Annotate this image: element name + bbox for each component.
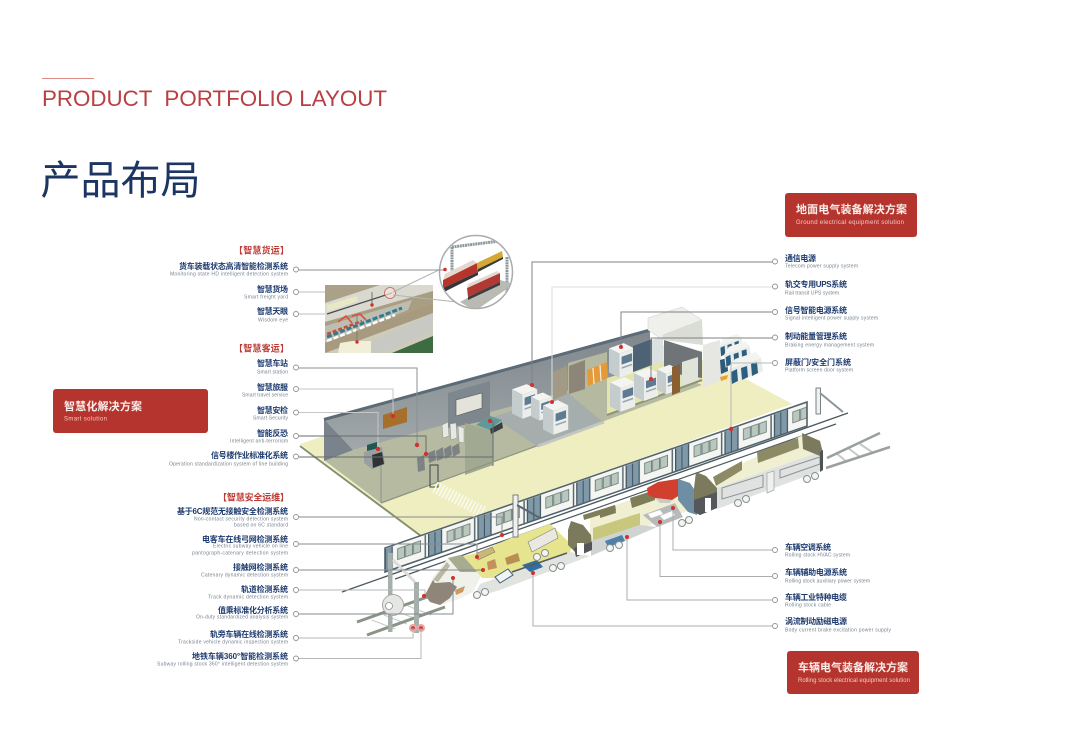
label: braking energy: Braking energy management system <box>785 343 874 349</box>
label: eddy current brake power: 涡流制动励磁电源 <box>785 616 847 626</box>
heading: smart freight: 【智慧货运】 <box>234 244 289 256</box>
room: power equipment floor edge <box>538 422 604 446</box>
magnifier: trains under gantry <box>440 236 514 311</box>
label: rolling stock cable: Rolling stock cable <box>785 603 831 609</box>
label: telecom power: Telecom power supply system <box>785 264 858 270</box>
panel: smart solution tag <box>53 389 208 433</box>
icon: trackside wheel scanner <box>382 594 404 616</box>
label: wisdom eye: 智慧天眼 <box>257 306 288 316</box>
label: smart security: 智慧安检 <box>257 405 288 415</box>
label: non-contact detection: based on 6C standard <box>234 523 288 529</box>
label: eddy current brake power: Body current brake excitation power supply <box>785 628 892 634</box>
label: intelligent anti-terrorism: Intelligent anti-terrorism <box>230 439 288 445</box>
platform crosswalk <box>435 487 483 512</box>
label: platform screen door <box>772 357 853 374</box>
label: 360 detection: 地铁车辆360°智能检测系统 <box>192 651 288 661</box>
room: power equipment floor <box>493 393 603 447</box>
label: catenary detection: Catenary dynamic detection system <box>201 573 288 579</box>
panel: rolling stock electrical equipment tag: 车辆电气装备解决方案 <box>798 660 908 674</box>
panel: ground electrical equipment tag: Ground electrical equipment solution <box>796 220 904 226</box>
red system markers <box>376 268 733 598</box>
label: smart travel service: Smart travel service <box>242 393 288 399</box>
label: trackside inspection: 轨旁车辆在线检测系统 <box>210 629 288 639</box>
building floor <box>324 365 702 503</box>
label: trackside inspection <box>178 629 298 646</box>
building walls <box>324 330 652 503</box>
label: wisdom eye <box>257 306 298 324</box>
icon: magnifier origin ring <box>384 288 396 298</box>
label: telecom power: 通信电源 <box>785 253 816 263</box>
label: eddy current brake power <box>772 616 892 634</box>
panel: rolling stock electrical equipment tag: Rolling stock electrical equipment solution <box>798 678 910 684</box>
label: braking energy <box>772 331 874 349</box>
wall window picture <box>456 393 482 416</box>
label: rail transit UPS: 轨交专用UPS系统 <box>785 279 847 289</box>
service desk cluster <box>476 416 503 434</box>
label: platform screen door: Platform screen door system <box>785 368 853 374</box>
Chinese title: 产品布局 <box>40 159 200 203</box>
label: track detection: 轨道检测系统 <box>241 584 288 594</box>
train: third car exterior <box>713 435 823 509</box>
ticket gates <box>442 422 464 443</box>
cabinets: communications and UPS <box>512 360 608 435</box>
leader lines: rolling stock <box>533 508 772 626</box>
security gates <box>417 443 460 472</box>
label: smart security: Smart Security <box>253 416 288 422</box>
heading: smart safety operations: 【智慧安全运维】 <box>218 492 289 502</box>
label: rolling stock HVAC: 车辆空调系统 <box>785 542 831 552</box>
label: track detection <box>208 584 298 601</box>
label: pantograph detection: pantograph-catenary detection system <box>192 551 288 557</box>
panel: smart solution tag: Smart solution <box>64 416 107 422</box>
label: smart freight yard <box>244 284 298 301</box>
label: signal power: Signal intelligent power supply system <box>785 316 878 322</box>
label: operation standardization <box>169 450 298 468</box>
left track <box>357 596 445 635</box>
panel: smart solution tag: 智慧化解决方案 <box>64 399 142 413</box>
label: smart security <box>253 405 298 422</box>
panel: rolling stock electrical equipment tag <box>787 651 919 694</box>
label: catenary detection <box>201 562 298 579</box>
leader lines: ground equipment <box>532 262 772 429</box>
label: wisdom eye: Wisdom eye <box>258 318 288 324</box>
right track <box>826 433 890 468</box>
label: rolling stock HVAC <box>772 542 850 559</box>
panel: ground electrical equipment tag: 地面电气装备解决方案 <box>796 202 907 216</box>
label: trackside inspection: Trackside vehicle dynamic inspection system <box>178 640 288 646</box>
label: rail transit UPS <box>772 279 847 297</box>
leader lines: smart freight <box>299 270 445 314</box>
cooling units <box>719 334 763 385</box>
trackside sensors <box>409 624 425 632</box>
label: pantograph detection <box>192 534 298 557</box>
security kiosk <box>364 442 385 469</box>
label: smart travel service <box>242 382 298 399</box>
station door <box>430 465 438 487</box>
train: second car <box>583 479 690 556</box>
label: rolling stock auxiliary power <box>772 567 870 585</box>
English heading: PRODUCT PORTFOLIO LAYOUT <box>42 86 387 111</box>
label: non-contact detection: Non-contact security detection system <box>194 517 288 523</box>
train: nose <box>425 555 480 605</box>
label: rolling stock auxiliary power: 车辆辅助电源系统 <box>785 567 847 577</box>
magnifier connector lines <box>393 268 457 302</box>
label: smart freight yard: Smart freight yard <box>244 295 288 301</box>
label: pantograph detection: Electric subway vehicle on line <box>213 544 288 550</box>
leader lines: smart passenger <box>299 368 493 457</box>
room: signal power room <box>568 340 702 422</box>
rooftop machinery block <box>648 307 722 388</box>
label: pantograph detection: 电客车在线弓网检测系统 <box>202 534 288 544</box>
train: end partition two <box>694 472 717 515</box>
label: smart station: Smart station <box>257 370 288 376</box>
train: end partition one <box>568 521 592 557</box>
heading: smart passenger: 【智慧客运】 <box>234 342 289 354</box>
label: freight loading detection: Monitoring state HD intelligent detection system <box>170 272 288 278</box>
cabinets: signal and braking <box>609 336 698 412</box>
label: non-contact detection: 基于6C规范无接触安全检测系统 <box>177 506 288 516</box>
leader lines: smart safety operations <box>299 517 502 658</box>
platform edge <box>300 446 421 536</box>
label: rolling stock HVAC: Rolling stock HVAC system <box>785 553 850 559</box>
label: rolling stock auxiliary power: Rolling stock auxiliary power system <box>785 579 870 585</box>
train: first car interior <box>463 524 590 598</box>
label: telecom power <box>772 253 858 270</box>
panel: ground electrical equipment tag <box>785 193 917 237</box>
label: signal power <box>772 305 878 322</box>
label: platform screen door: 屏蔽门/安全门系统 <box>785 357 851 367</box>
label: operation standardization: Operation standardization system of line building <box>169 462 288 468</box>
label: rolling stock cable: 车辆工业特种电缆 <box>785 592 847 602</box>
label: on-duty analysis <box>196 605 298 621</box>
label: smart station <box>257 358 298 376</box>
label: intelligent anti-terrorism: 智能反恐 <box>257 428 288 438</box>
label: rolling stock cable <box>772 592 847 609</box>
label: non-contact detection <box>177 506 298 529</box>
label: 360 detection <box>157 651 298 668</box>
label: 360 detection: Subway rolling stock 360° intelligent detection system <box>157 662 288 668</box>
label: on-duty analysis: On-duty standardized analysis system <box>196 615 288 621</box>
label: freight loading detection <box>170 261 298 278</box>
label: smart station: 智慧车站 <box>257 358 288 368</box>
label: braking energy: 制动能量管理系统 <box>785 331 847 341</box>
label: freight loading detection: 货车装载状态高清智能检测系统 <box>179 261 288 271</box>
wall poster <box>383 407 407 429</box>
label: rail transit UPS: Rail transit UPS system <box>785 291 839 297</box>
inset: freight yard aerial view <box>325 285 433 353</box>
train: driver cab section <box>678 479 698 515</box>
overhead rail lines <box>342 413 848 598</box>
label: signal power: 信号智能电源系统 <box>785 305 847 315</box>
label: on-duty analysis: 值乘标准化分析系统 <box>218 605 288 615</box>
label: smart travel service: 智慧旅服 <box>257 382 288 392</box>
label: catenary detection: 接触网检测系统 <box>233 562 288 572</box>
header accent rule <box>42 78 94 80</box>
train: end partition three <box>802 433 823 472</box>
train: wheels <box>474 472 818 598</box>
platform floor <box>300 340 792 537</box>
label: track detection: Track dynamic detection system <box>208 595 288 601</box>
label: intelligent anti-terrorism <box>230 428 298 445</box>
catenary poles <box>388 388 843 633</box>
label: smart freight yard: 智慧货场 <box>257 284 288 294</box>
platform screen doors <box>385 402 807 572</box>
infographic canvas <box>42 78 919 694</box>
label: operation standardization: 信号楼作业标准化系统 <box>211 450 288 460</box>
